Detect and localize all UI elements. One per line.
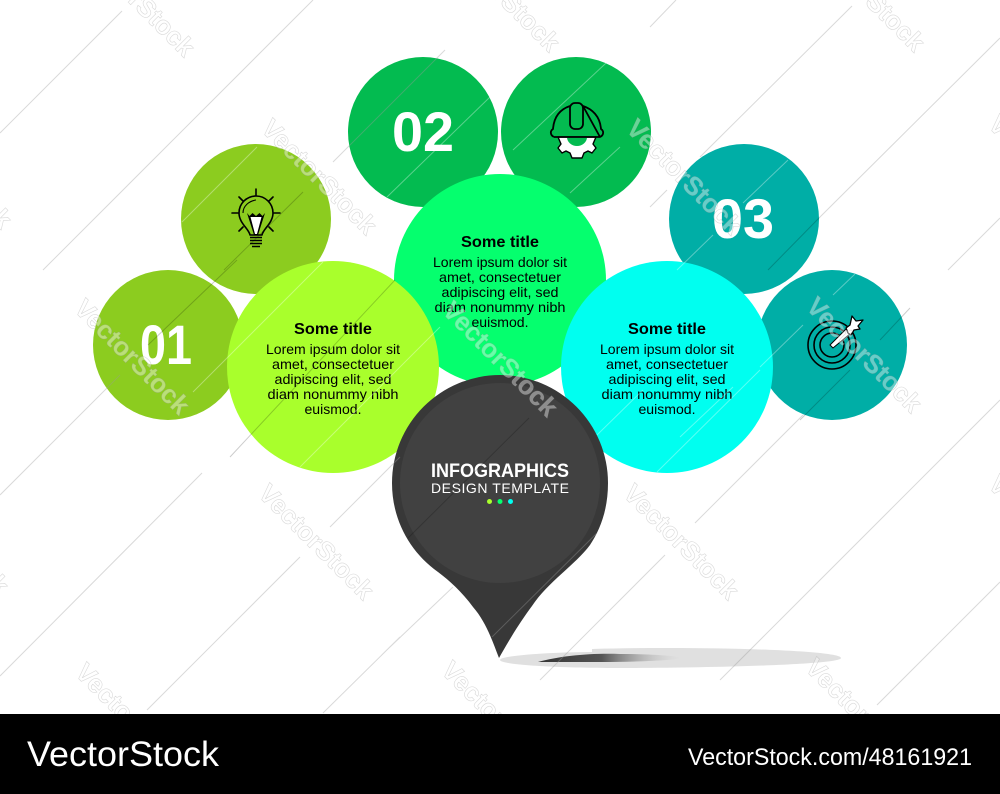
- text: VectorStock: [436, 655, 563, 783]
- text: VectorStock: [437, 295, 564, 423]
- circle: step 02 number background: [348, 57, 498, 207]
- panel: step 01 text circle: euismod.: [304, 401, 362, 417]
- panel: step 01 text circle: Lorem ipsum dolor sit: [266, 341, 400, 357]
- panel: step 02 text circle: [394, 174, 606, 386]
- panel: step 03 text circle: Some title: [628, 321, 706, 338]
- panel: step 01 text circle: Some title: [294, 321, 372, 338]
- panel: step 03 text circle: [561, 261, 773, 473]
- panel: step 01 text circle: adipiscing elit, sed: [274, 371, 392, 387]
- footer image id: VectorStock.com/48161921: [688, 744, 972, 771]
- icon: hard hat with gear: [551, 103, 603, 158]
- text: VectorStock: [621, 113, 748, 241]
- number 02: 02: [392, 100, 454, 163]
- text: VectorStock: [69, 293, 196, 421]
- panel: step 02 text circle: diam nonummy nibh: [434, 299, 566, 315]
- footer logo: VectorStock: [27, 735, 220, 774]
- panel: step 03 text circle: adipiscing elit, sed: [608, 371, 726, 387]
- icon: target with dart: [808, 316, 863, 369]
- number 01: 01: [140, 313, 192, 376]
- number 03: 03: [712, 187, 774, 250]
- pin ground shadow: [500, 648, 841, 668]
- circle: step 02 icon background: [501, 57, 651, 207]
- panel: step 02 text circle: Lorem ipsum dolor sit: [433, 254, 567, 270]
- panel: step 01 text circle: amet, consectetuer: [272, 356, 394, 372]
- panel: step 02 text circle: euismod.: [472, 314, 528, 330]
- pin heading: INFOGRAPHICS: [431, 461, 569, 482]
- panel: step 02 text circle: Some title: [461, 234, 539, 251]
- pin heading: DESIGN TEMPLATE: [431, 480, 569, 496]
- text: VectorStock: [70, 657, 197, 785]
- icon: light bulb: [232, 189, 280, 246]
- central map pin: [392, 375, 608, 658]
- pin colour dots: [487, 499, 513, 504]
- panel: step 02 text circle: amet, consectetuer: [439, 269, 561, 285]
- panel: step 03 text circle: amet, consectetuer: [606, 356, 728, 372]
- text: VectorStock: [253, 478, 380, 606]
- panel: step 02 text circle: adipiscing elit, sed: [442, 284, 558, 300]
- circle: step 03 number background: [669, 144, 819, 294]
- text: VectorStock: [800, 652, 927, 780]
- circle: step 01 icon background: [181, 144, 331, 294]
- panel: step 01 text circle: [227, 261, 439, 473]
- circle: step 01 number background: [93, 270, 243, 420]
- text: VectorStock: [256, 113, 383, 241]
- text: VectorStock: [801, 291, 928, 419]
- panel: step 03 text circle: Lorem ipsum dolor sit: [600, 341, 734, 357]
- panel: step 03 text circle: euismod.: [638, 401, 696, 417]
- footer bar: [0, 714, 1000, 794]
- text: VectorStock: [618, 478, 745, 606]
- panel: step 03 text circle: diam nonummy nibh: [602, 386, 732, 402]
- pin heading: [431, 461, 569, 496]
- circle: step 03 icon background: [757, 270, 907, 420]
- panel: step 01 text circle: diam nonummy nibh: [268, 386, 398, 402]
